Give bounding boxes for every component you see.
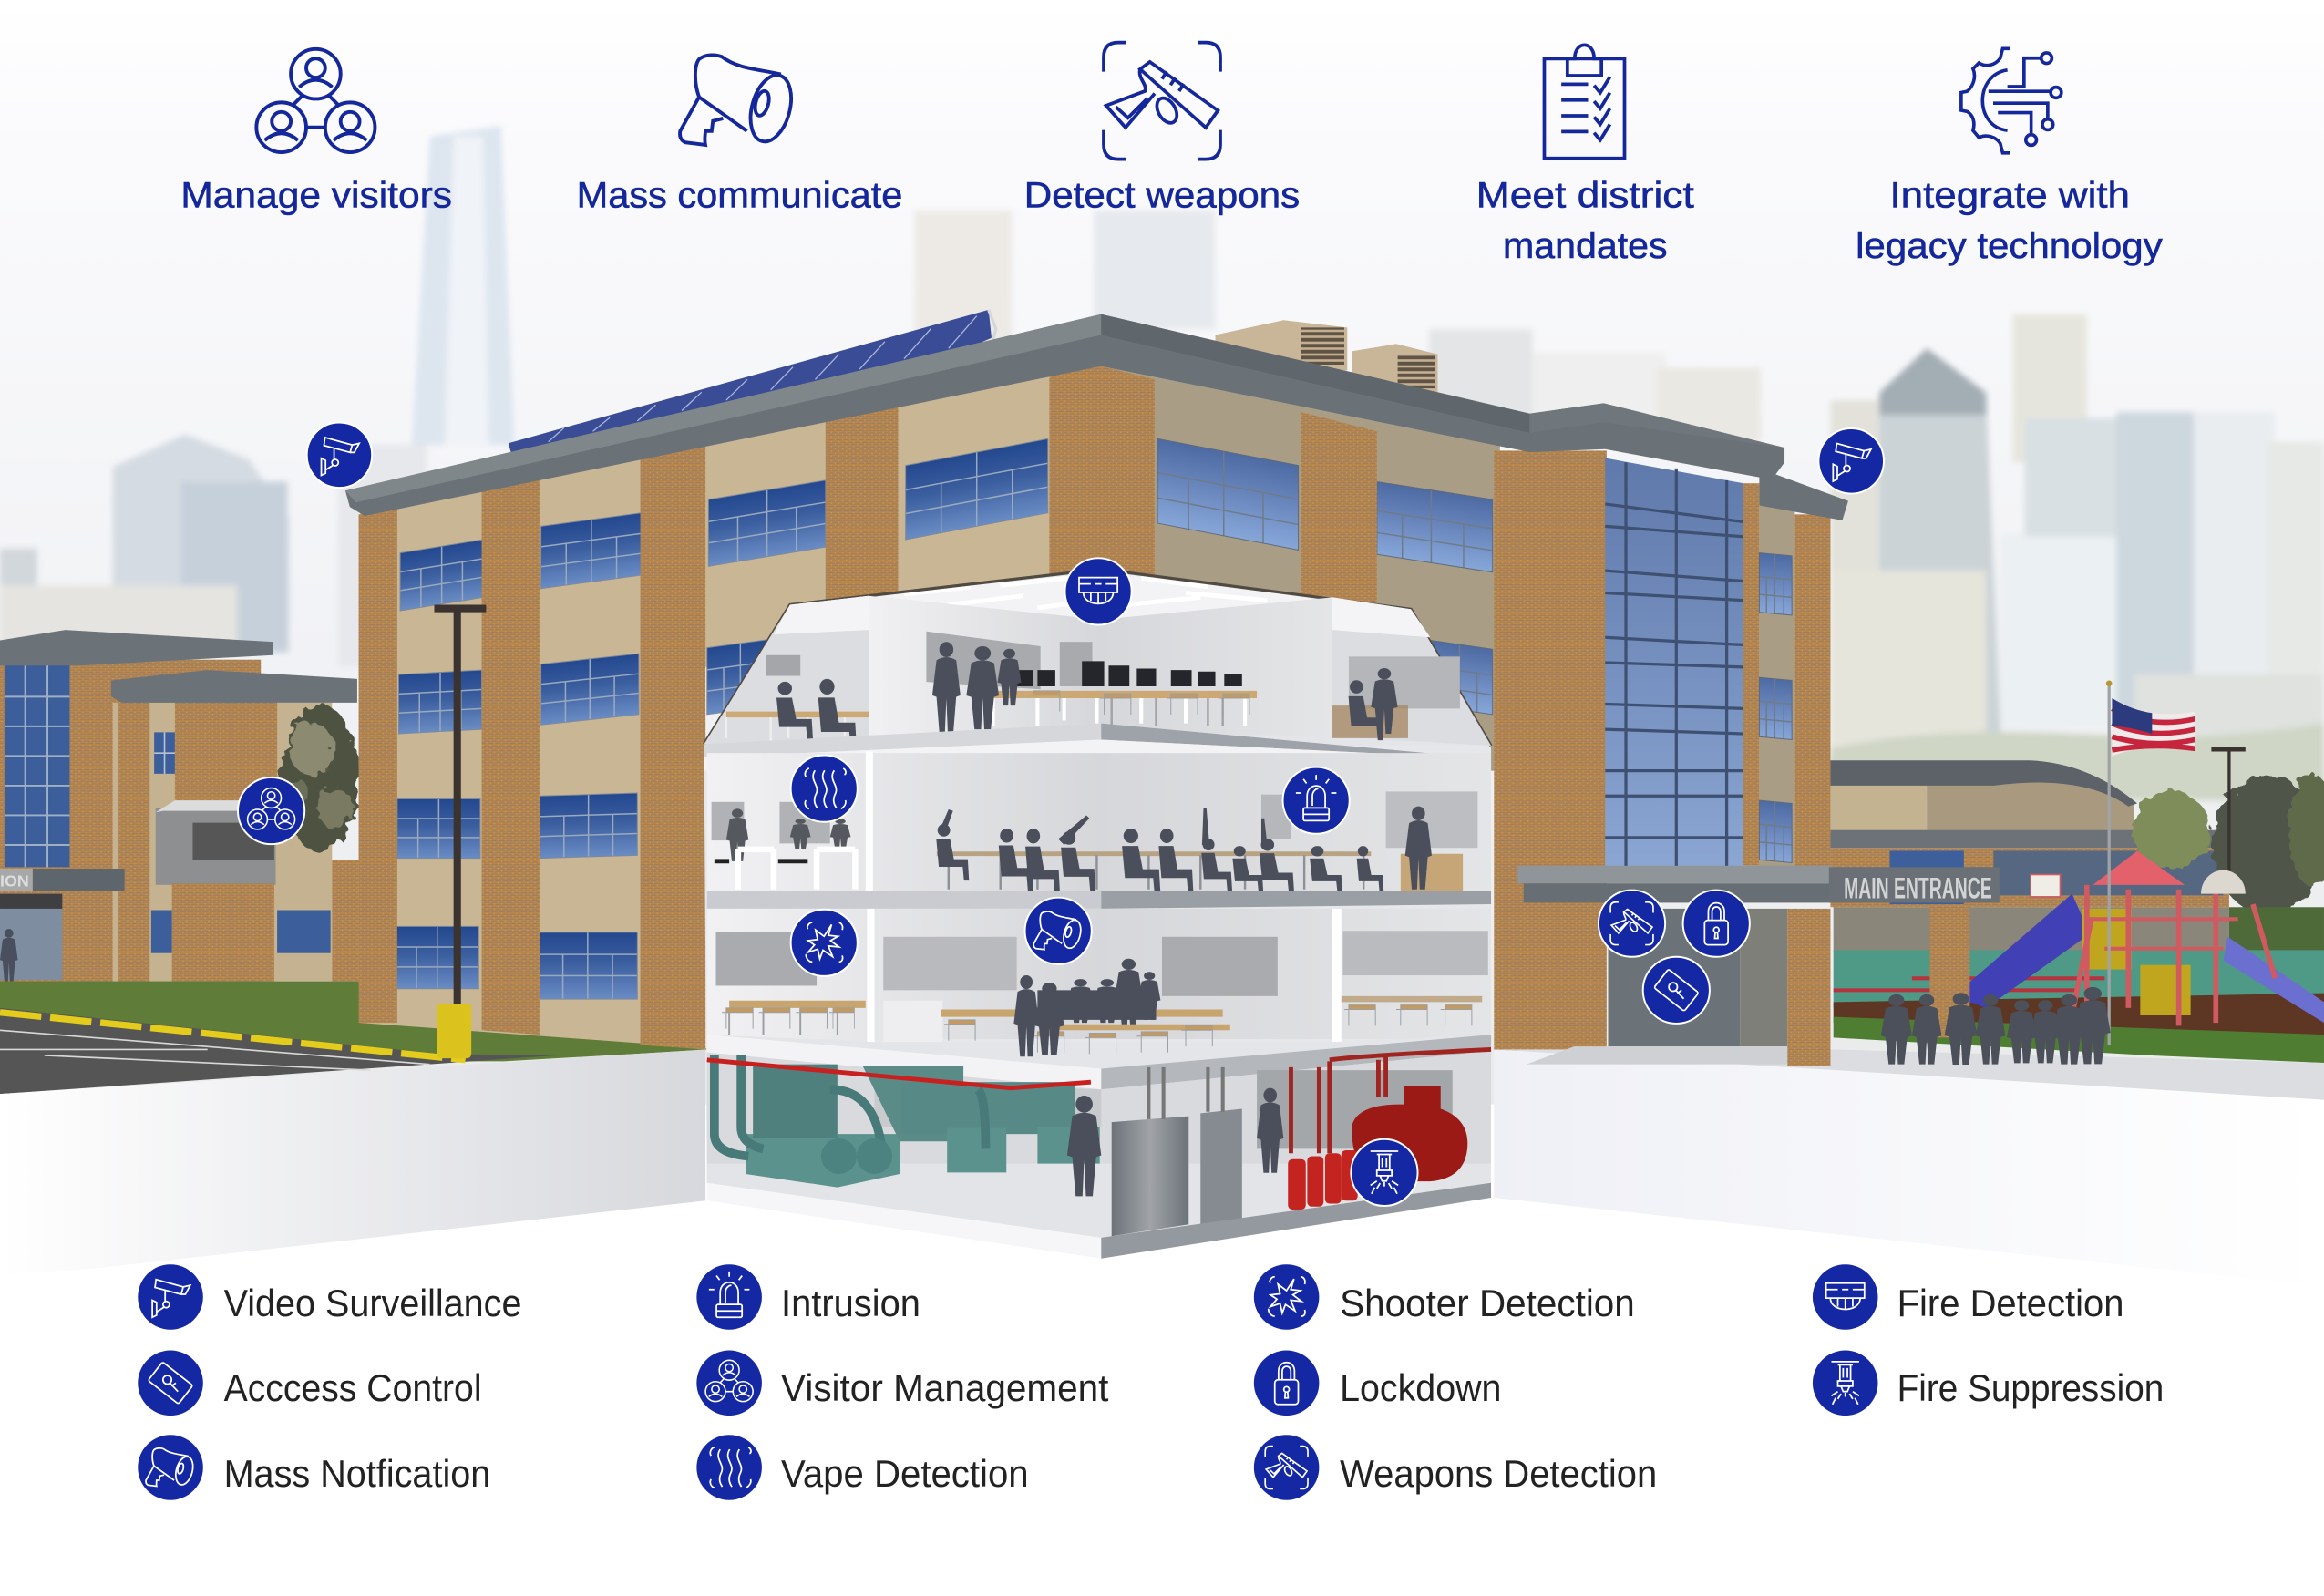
first floor slab: [707, 1035, 1491, 1089]
main entrance lettering: MAIN ENTRANCE: [1844, 872, 1992, 905]
top capability: integrate with legacy technology: Integrate with: [1889, 176, 2130, 216]
entrance canopy and sign: [1517, 866, 2000, 1066]
gray cabinets: [1112, 1067, 1242, 1236]
marker: access control: [1643, 957, 1710, 1024]
top floor ceiling with lights: [704, 569, 1491, 746]
marker: video surveillance right: [1818, 428, 1884, 494]
legend: intrusion: [696, 1264, 920, 1330]
sky background: [0, 0, 2324, 1105]
marker: weapons detection: [1599, 891, 1665, 957]
light pole with yellow base: [435, 605, 486, 1058]
white ground plinth right: [1494, 1049, 2324, 1287]
legend: vape detection: [696, 1435, 1029, 1500]
left secondary building: [0, 630, 359, 983]
marker: mass notification: [1025, 898, 1092, 964]
basement workers: [1067, 1088, 1283, 1196]
top capability: manage visitors: [180, 49, 452, 216]
legend: video surveillance: Video Surveillance: [224, 1282, 521, 1324]
tree beside left building: [282, 704, 359, 852]
top floor center room: [869, 596, 1332, 736]
legend: mass notification: [138, 1435, 490, 1500]
top capability: mass communicate: Mass communicate: [577, 176, 902, 216]
legend: lockdown: Lockdown: [1340, 1366, 1501, 1409]
white ground plinth left: [0, 1049, 705, 1275]
marker: video surveillance left: [307, 422, 372, 488]
lawn: [0, 982, 712, 1061]
lamp post at playground: [2211, 747, 2246, 874]
top capability: meet district mandates: [1476, 45, 1694, 266]
top capability: integrate with legacy technology: [1856, 48, 2163, 266]
legend: intrusion: Intrusion: [781, 1282, 920, 1324]
entrance tower: [1494, 450, 1830, 1051]
second floor classroom students: [936, 791, 1477, 895]
right facade windows: [1157, 438, 1493, 715]
flagpole and American flag: [2106, 680, 2195, 1045]
legend: video surveillance: [138, 1264, 521, 1330]
legend: lockdown: [1254, 1351, 1501, 1416]
legend: shooter detection: Shooter Detection: [1340, 1282, 1635, 1324]
walkway in front of entrance: [1494, 1049, 2324, 1100]
top capability: detect weapons: [1024, 43, 1300, 216]
basement bottom slab: [707, 1183, 1491, 1259]
red fire tank and pipes: [1288, 1049, 1491, 1210]
legend: fire suppression: Fire Suppression: [1897, 1366, 2164, 1409]
person at left entrance: [0, 929, 18, 982]
legend: visitor management: Visitor Management: [781, 1366, 1109, 1409]
legend: mass notification: Mass Notfication: [224, 1452, 490, 1495]
marker: lockdown: [1683, 891, 1750, 957]
left secondary building: ION: [0, 872, 29, 891]
second floor white pillar: [866, 752, 873, 892]
legend: access control: [138, 1351, 482, 1416]
roof cornice: [345, 314, 1848, 520]
parking lot with curb: [0, 1008, 557, 1094]
legend: vape detection: Vape Detection: [781, 1452, 1029, 1495]
floor slab two: [707, 891, 1491, 909]
legend: access control: Acccess Control: [224, 1366, 482, 1409]
cut edge outline: [704, 569, 1491, 746]
solar panels on roof: [509, 310, 996, 454]
top floor left room: [704, 596, 869, 749]
mechanical basement: [707, 1051, 1491, 1238]
first floor gathered students: [1013, 959, 1160, 1056]
brick piers: [359, 366, 1377, 1049]
left facade windows: [396, 438, 1048, 999]
hazy city skyline: [0, 126, 2324, 800]
left facade wall: [360, 348, 1105, 1048]
top capability: integrate with legacy technology: legacy technology: [1856, 226, 2163, 266]
legend: visitor management: [696, 1351, 1109, 1416]
cut opening base: [704, 569, 1491, 1257]
second floor wall: [707, 753, 1491, 892]
rooftop HVAC units: [1216, 320, 1437, 393]
people in top floor center: [932, 642, 1022, 732]
top floor right room: [1332, 597, 1491, 746]
legend: weapons detection: [1254, 1435, 1657, 1500]
floor slab three: [704, 724, 1491, 771]
marker: intrusion: [1283, 767, 1350, 834]
group of students walking: [1881, 987, 2111, 1065]
playground court, mulch and grass: [1834, 907, 2324, 1063]
gymnasium behind entrance: [1830, 760, 2229, 907]
top capability: detect weapons: Detect weapons: [1024, 176, 1300, 216]
marker: fire suppression: [1351, 1139, 1418, 1206]
teal chillers: [715, 1055, 1100, 1188]
marker: shooter detection: [791, 910, 858, 976]
legend: fire detection: [1813, 1264, 2123, 1330]
first floor tables and chairs: [722, 996, 1482, 1054]
main school building: [345, 314, 1848, 1051]
first floor wall: [707, 909, 1491, 1039]
legend: weapons detection: Weapons Detection: [1340, 1452, 1657, 1495]
marker: vape detection: [791, 756, 858, 822]
first floor whiteboards and pillars: [715, 909, 1488, 1042]
top capability: manage visitors: Manage visitors: [180, 176, 452, 216]
legend: fire suppression: [1813, 1351, 2164, 1416]
playground structure: [1953, 850, 2324, 1030]
top capability: mass communicate: [577, 55, 902, 216]
legend: shooter detection: [1254, 1264, 1635, 1330]
right facade wall: [1105, 348, 1500, 771]
top capability: meet district mandates: Meet district: [1476, 176, 1694, 216]
second floor left room: [712, 802, 855, 890]
marker: fire detection: [1064, 558, 1132, 624]
building cutaway interior: [704, 569, 1491, 1259]
red overhead pipe: [707, 1060, 1091, 1088]
top capability: meet district mandates: mandates: [1503, 226, 1668, 266]
marker: visitor management: [238, 777, 304, 844]
legend: fire detection: Fire Detection: [1897, 1282, 2123, 1324]
trees behind playground: [2133, 774, 2324, 913]
